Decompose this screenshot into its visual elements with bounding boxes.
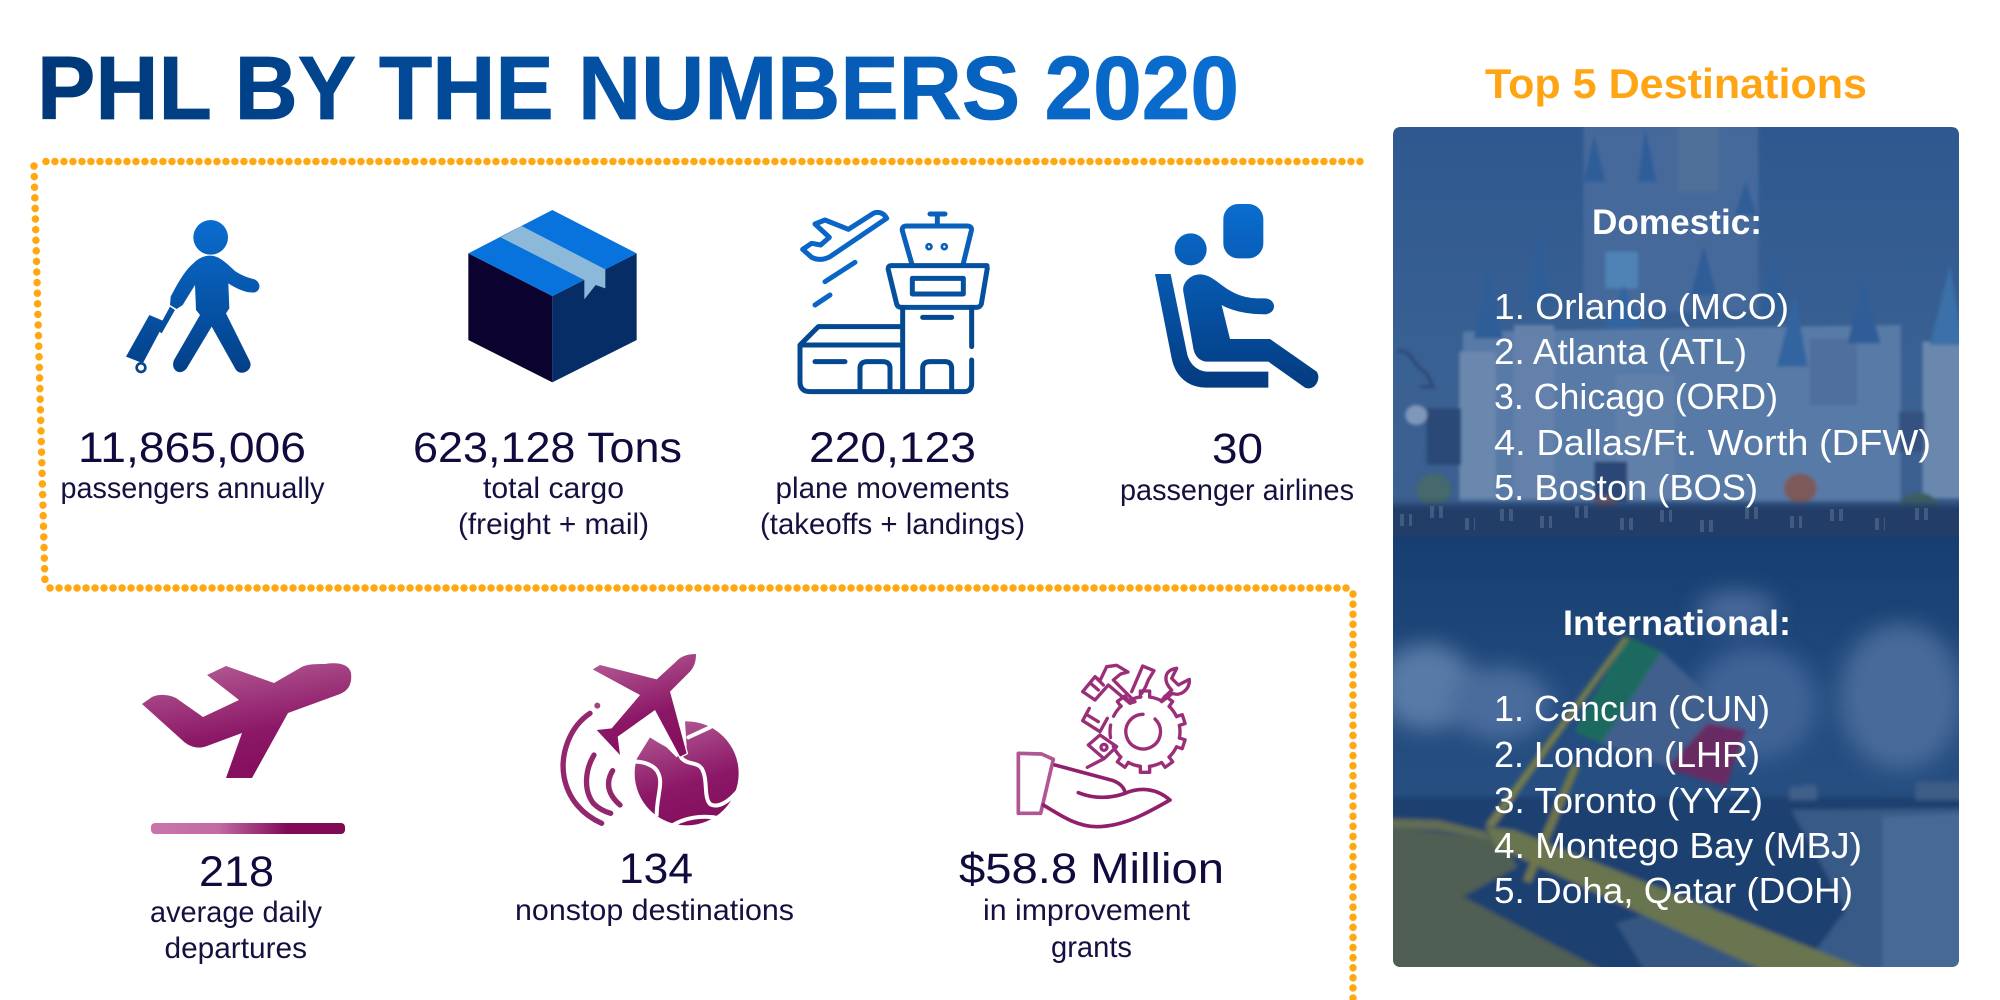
heading: top 5 destinations: Top 5 Destinations — [1485, 60, 1867, 107]
icon: departing plane — [142, 663, 351, 834]
label: average daily — [150, 896, 322, 929]
stat: average daily departures — [142, 663, 351, 965]
photo: castle background — [1385, 125, 1967, 544]
list: international top five: 4. Montego Bay (MBJ) — [1494, 825, 1862, 866]
photo: flag and boat background — [1379, 536, 1974, 983]
label line two: grants — [1051, 931, 1132, 964]
icon: seated passenger — [1155, 204, 1318, 388]
list: domestic top five: 4. Dallas/Ft. Worth (DFW) — [1494, 422, 1931, 463]
icon: walking traveller with suitcase — [126, 220, 259, 373]
number: 134 — [619, 845, 693, 893]
list: domestic top five: 2. Atlanta (ATL) — [1494, 331, 1747, 372]
heading: international: International: — [1563, 604, 1791, 643]
dotted orange border — [34, 162, 1360, 1000]
title: PHL BY THE NUMBERS 2020 — [37, 39, 1239, 139]
label: plane movements — [776, 472, 1010, 505]
label line two: (takeoffs + landings) — [760, 508, 1025, 541]
stat: passengers annually — [60, 220, 324, 505]
stat: plane movements — [760, 212, 1025, 541]
number: 30 — [1212, 425, 1263, 473]
list: domestic top five — [1494, 286, 1931, 508]
panel: international destinations — [1379, 536, 1974, 983]
icon: globe and plane — [563, 654, 740, 828]
number: 623,128 Tons — [413, 424, 682, 472]
list: international top five: 2. London (LHR) — [1494, 734, 1760, 775]
list: international top five: 5. Doha, Qatar (DOH) — [1494, 870, 1853, 911]
label: in improvement — [983, 894, 1191, 927]
panel: domestic destinations — [1385, 125, 1967, 544]
stat: nonstop destinations — [515, 654, 794, 927]
runway bar — [151, 823, 345, 834]
label line two: (freight + mail) — [458, 508, 649, 541]
stat: improvement grants — [959, 665, 1224, 964]
list: domestic top five: 3. Chicago (ORD) — [1494, 376, 1778, 417]
label line two: departures — [164, 932, 307, 965]
label: passenger airlines — [1120, 474, 1354, 507]
icon: hand holding gear and tools — [1018, 665, 1189, 827]
list: domestic top five: 1. Orlando (MCO) — [1494, 286, 1789, 327]
icon: control tower and plane — [800, 212, 987, 392]
label: passengers annually — [60, 472, 324, 505]
stat: passenger airlines — [1120, 204, 1354, 507]
icon: cardboard box — [468, 210, 637, 382]
list: international top five: 3. Toronto (YYZ) — [1494, 780, 1763, 821]
stat: total cargo — [413, 210, 682, 541]
number: 220,123 — [809, 424, 976, 472]
heading: domestic: Domestic: — [1592, 203, 1762, 242]
list: domestic top five: 5. Boston (BOS) — [1494, 467, 1758, 508]
label: nonstop destinations — [515, 894, 794, 927]
list: international top five — [1494, 688, 1862, 911]
label: total cargo — [483, 472, 624, 505]
number: 218 — [199, 848, 274, 896]
number: $58.8 Million — [959, 845, 1224, 893]
number: 11,865,006 — [78, 424, 306, 472]
list: international top five: 1. Cancun (CUN) — [1494, 688, 1770, 729]
